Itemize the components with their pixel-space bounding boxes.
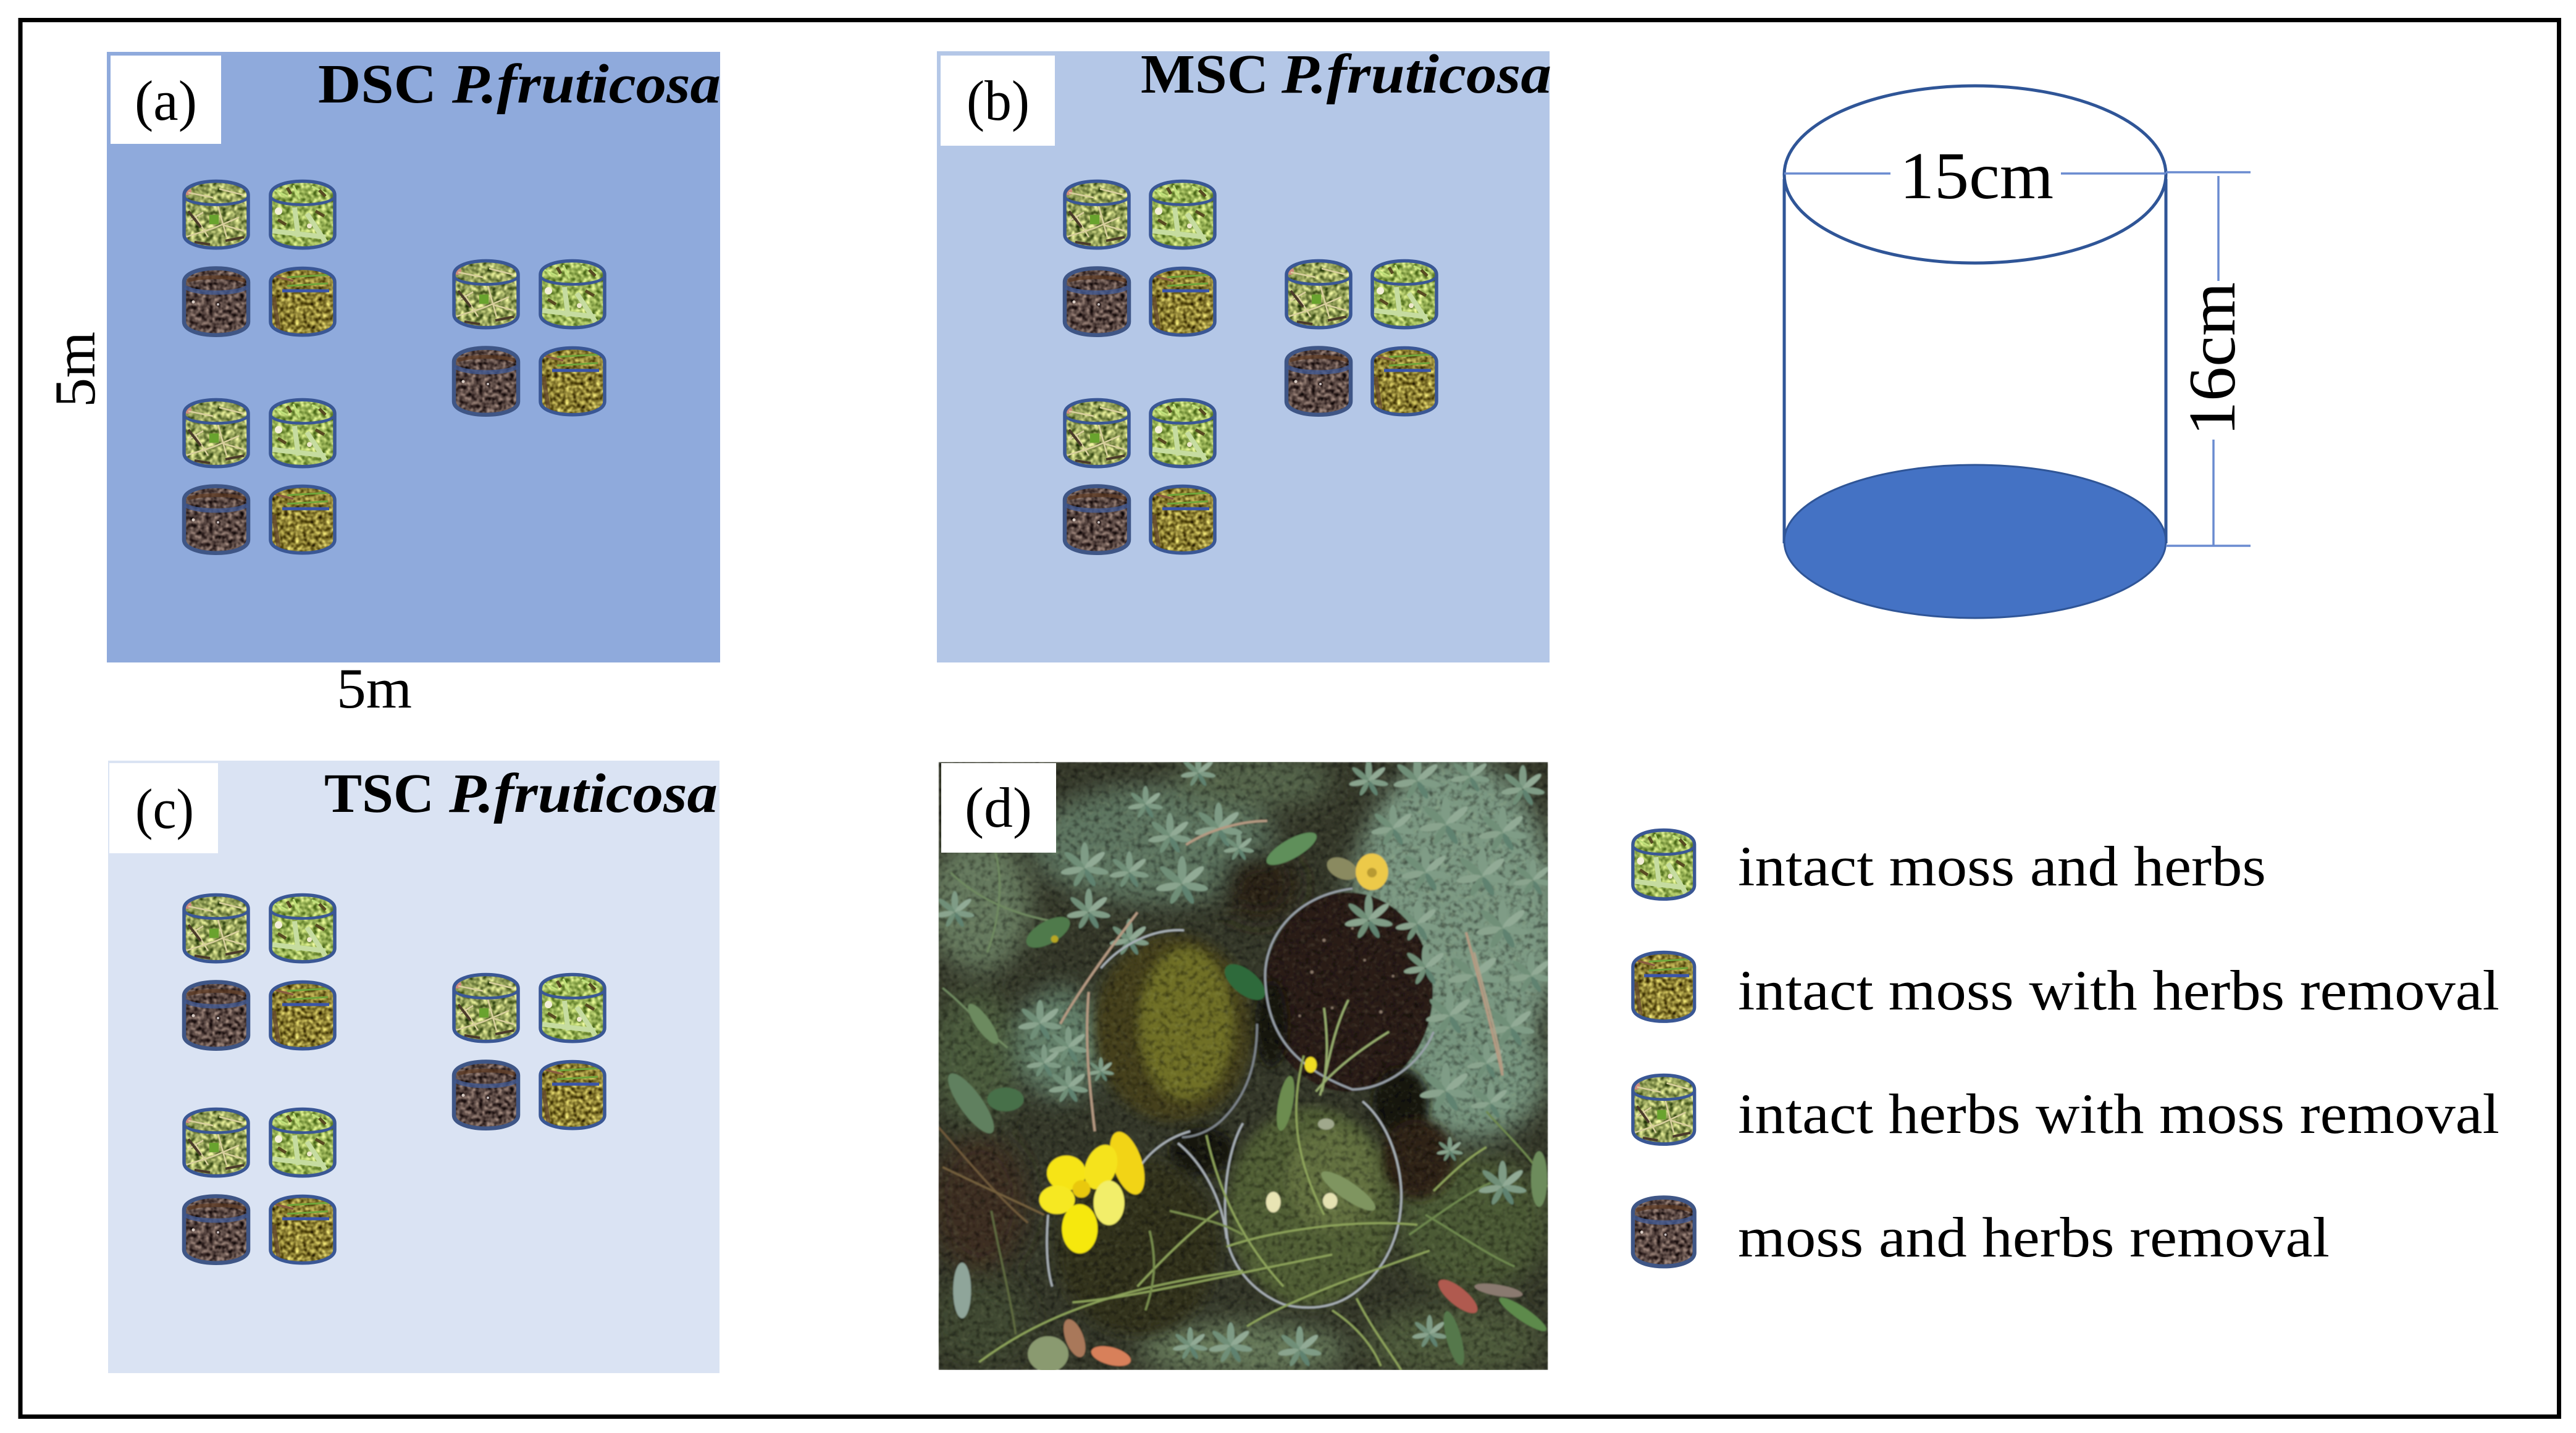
panel b: MSC plot xyxy=(937,44,1551,662)
height label 16cm: 16cm xyxy=(2176,282,2249,436)
moss pot xyxy=(1095,934,1253,1121)
cylinder diagram xyxy=(1784,86,2251,618)
pot group b lower left xyxy=(1063,399,1217,554)
panel d: field photo illustration xyxy=(926,753,1559,1378)
label box (a): (a) xyxy=(135,69,197,132)
pot group c lower left xyxy=(182,1108,337,1264)
dimension label: vertical 5m: 5m xyxy=(43,332,107,407)
title: MSC P.fruticosa: P.fruticosa xyxy=(1281,44,1551,105)
label box (d) xyxy=(941,763,1056,853)
label box (b) xyxy=(941,56,1055,146)
legend: intact moss with herbs removal: intact moss with herbs removal xyxy=(1738,959,2499,1022)
legend: intact moss and herbs: intact moss and herbs xyxy=(1738,835,2266,898)
plot background b xyxy=(937,51,1550,662)
pot group b upper left xyxy=(1063,180,1217,336)
label box (d): (d) xyxy=(965,776,1032,839)
title: MSC P.fruticosa: MSC xyxy=(1141,44,1269,105)
pot group c upper left xyxy=(182,894,337,1050)
title: DSC P.fruticosa xyxy=(318,54,721,115)
panel a: DSC plot xyxy=(107,52,721,662)
plot background c xyxy=(108,761,720,1373)
plot background a xyxy=(107,52,720,662)
title: DSC P.fruticosa: P.fruticosa xyxy=(451,54,721,115)
title: TSC P.fruticosa: P.fruticosa xyxy=(448,763,718,824)
legend: moss and herbs removal xyxy=(1631,1197,2330,1269)
herb pot xyxy=(1056,980,1454,1334)
pot group a right xyxy=(452,260,606,416)
label box (c): (c) xyxy=(135,777,194,840)
legend: intact herbs with moss removal: intact herbs with moss removal xyxy=(1738,1082,2499,1145)
legend: moss and herbs removal: moss and herbs removal xyxy=(1738,1206,2330,1269)
label box (c) xyxy=(109,763,218,853)
small flowers xyxy=(1051,853,1388,1073)
label box (a) xyxy=(111,56,221,144)
title: DSC P.fruticosa: DSC xyxy=(318,54,437,115)
legend: intact moss and herbs xyxy=(1631,829,2266,900)
pot group c right xyxy=(452,974,606,1130)
panel c: TSC plot xyxy=(108,761,720,1373)
cylinder body lines xyxy=(1784,179,2166,543)
grass blades xyxy=(939,853,1547,1370)
cylinder base ellipse xyxy=(1784,465,2166,618)
soil speckles xyxy=(1298,927,1395,1017)
yellow flower xyxy=(1039,1127,1151,1253)
pot group a upper left xyxy=(182,180,337,336)
dimension label: horizontal 5m: 5m xyxy=(337,657,412,720)
pot group b right xyxy=(1285,260,1438,416)
width label 15cm: 15cm xyxy=(1900,140,2054,213)
sage leaf clusters xyxy=(1349,759,1388,796)
title: TSC P.fruticosa: TSC xyxy=(324,763,434,824)
texture grain xyxy=(939,762,1548,1370)
cylinder top ellipse xyxy=(1784,86,2166,263)
pot rings xyxy=(1047,888,1433,1308)
label box (b): (b) xyxy=(967,69,1030,132)
dimension lines xyxy=(1784,172,2251,546)
soil pot xyxy=(1264,893,1433,1092)
broad leaves xyxy=(941,827,1550,1372)
legend xyxy=(1631,829,2499,1269)
title: TSC P.fruticosa xyxy=(324,763,718,824)
shrub stems xyxy=(1060,821,1503,1131)
title: MSC P.fruticosa xyxy=(1141,44,1551,105)
pot group a lower left xyxy=(182,399,337,554)
